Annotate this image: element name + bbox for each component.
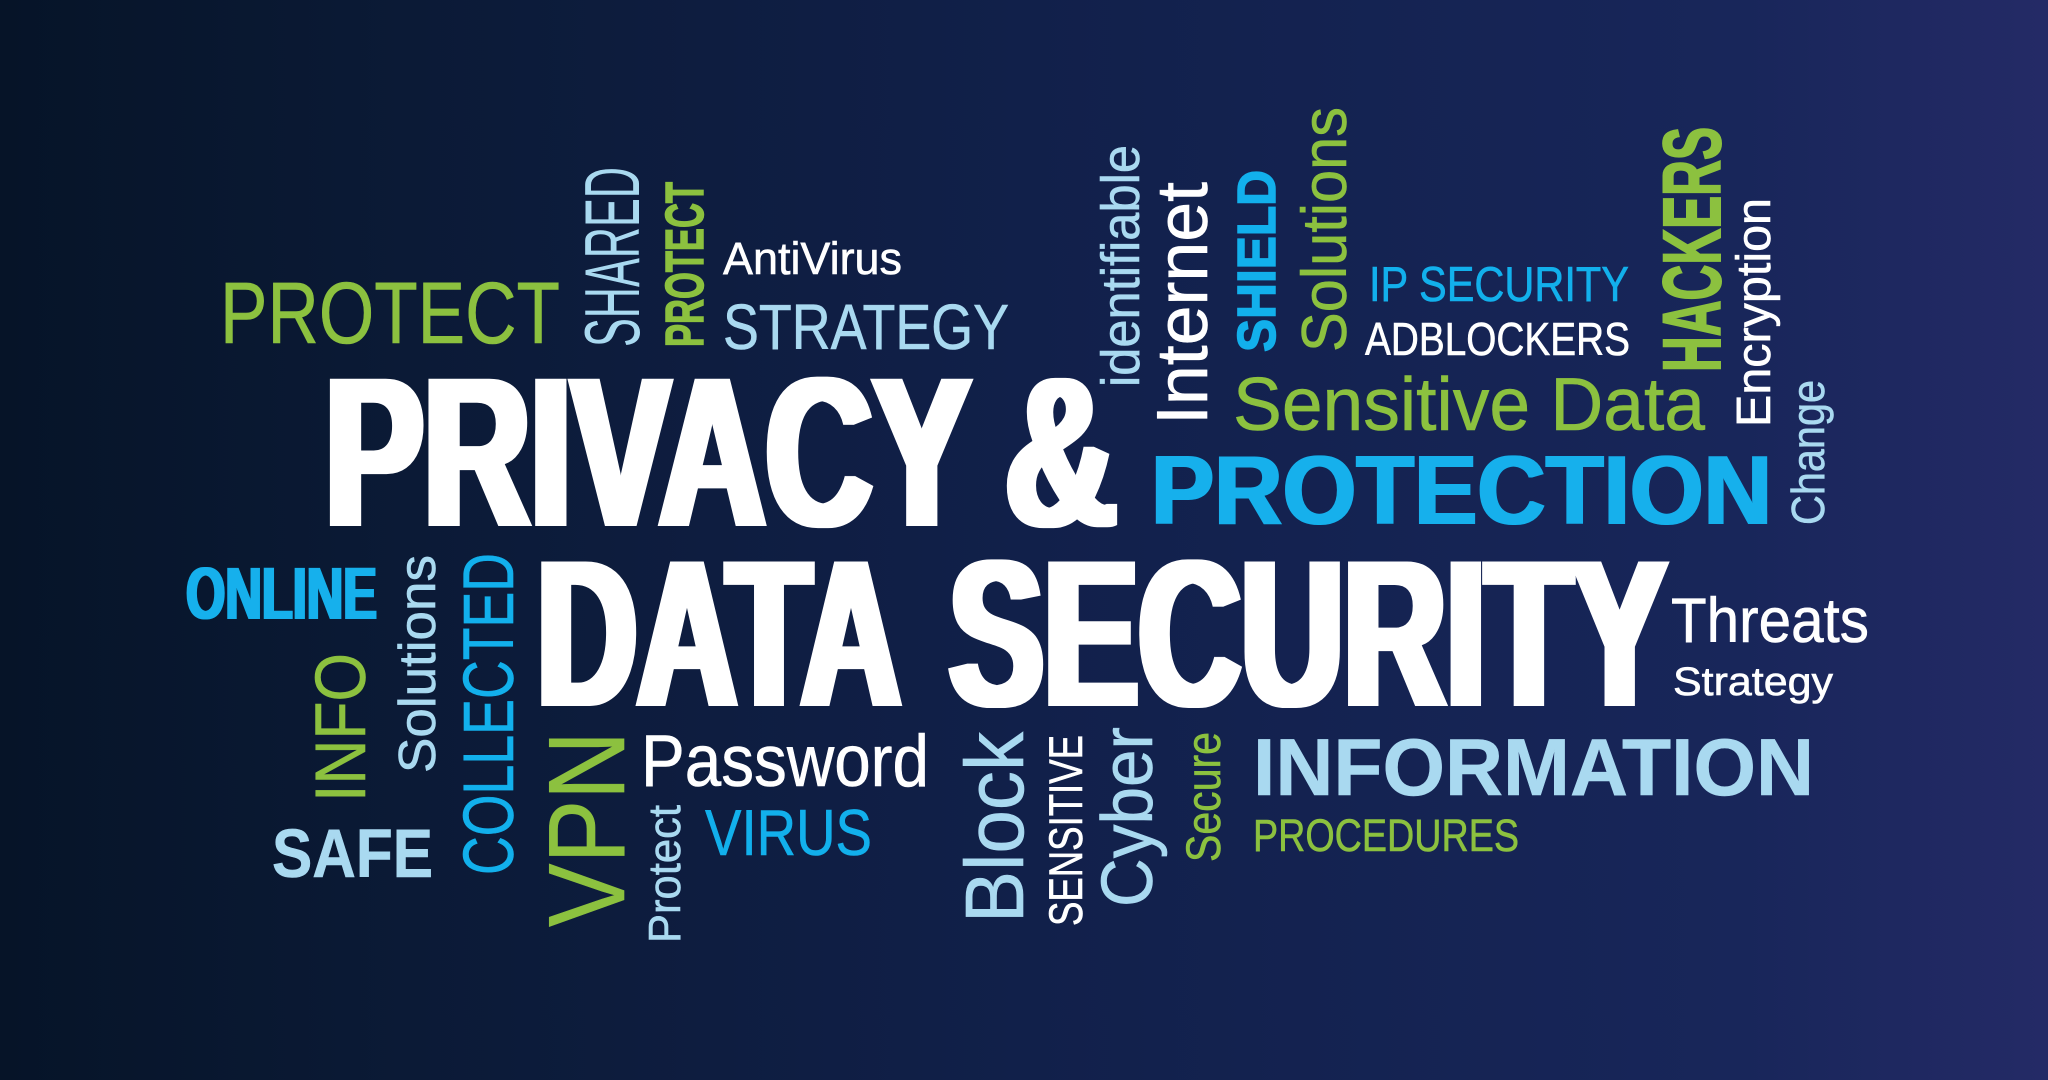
word: INFO (vertical): INFO [302, 653, 381, 802]
title: Privacy & Data Security: & [1005, 333, 1117, 572]
word: COLLECTED (vertical): COLLECTED [450, 553, 529, 875]
word: Password: Password [641, 721, 929, 802]
word: VIRUS: VIRUS [705, 796, 872, 869]
word: IP SECURITY: IP SECURITY [1369, 258, 1629, 312]
word: STRATEGY: STRATEGY [723, 291, 1009, 363]
word: INFORMATION (bold): INFORMATION [1253, 723, 1814, 813]
word: Strategy: Strategy [1673, 660, 1833, 704]
word: Change (vertical): Change [1782, 380, 1834, 525]
word: SENSITIVE (vertical): SENSITIVE [1039, 735, 1092, 926]
word: SHIELD (vertical bold): SHIELD [1227, 170, 1287, 352]
word: PROTECT (vertical bold): PROTECT [655, 182, 715, 347]
title: Privacy & Data Security: DATA [537, 516, 901, 751]
title: Privacy & Data Security: PRIVACY [325, 333, 971, 572]
word: Block (vertical): Block [948, 732, 1041, 923]
word: Solutions (vertical green): Solutions [1290, 107, 1360, 352]
word: VPN (vertical): VPN [526, 731, 648, 927]
title: Privacy & Data Security: SECURITY [949, 516, 1667, 751]
word: AntiVirus: AntiVirus [723, 233, 902, 284]
word: ONLINE (bold blue): ONLINE [186, 552, 377, 635]
title: Privacy & Data Security [325, 333, 1667, 751]
word: Sensitive Data: Sensitive Data [1233, 362, 1705, 446]
word: PROCEDURES: PROCEDURES [1253, 810, 1519, 861]
word: SAFE (bold): SAFE [272, 815, 433, 892]
word: PROTECTION (bold blue): PROTECTION [1151, 435, 1772, 545]
word: Cyber (vertical): Cyber [1088, 727, 1168, 907]
word: Protect (vertical): Protect [639, 805, 690, 943]
word: PROTECT (green): PROTECT [220, 265, 560, 362]
word: Encryption (vertical): Encryption [1728, 198, 1781, 427]
word: ADBLOCKERS: ADBLOCKERS [1365, 313, 1630, 365]
word: Secure (vertical): Secure [1178, 732, 1231, 862]
word: Threats: Threats [1671, 586, 1869, 656]
word: identifiable (vertical): identifiable [1091, 145, 1151, 387]
word: Solutions (vertical light): Solutions [389, 555, 447, 773]
word: Internet (vertical): Internet [1143, 182, 1223, 425]
word: SHARED (vertical): SHARED [568, 167, 656, 347]
